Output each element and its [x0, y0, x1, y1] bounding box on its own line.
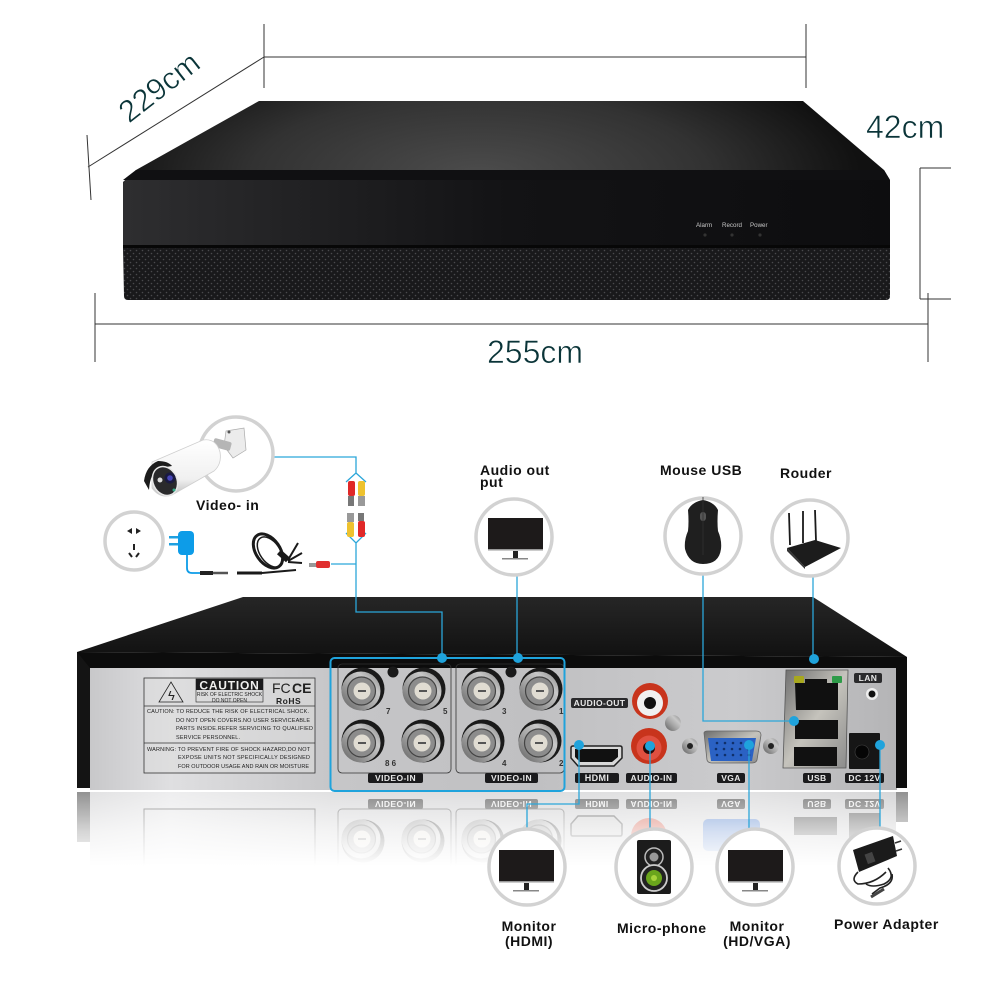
caution label: CAUTION: TO REDUCE THE RISK OF ELECTRICAL SHOCK. [147, 709, 309, 715]
audio in port [626, 728, 677, 783]
connection lines [273, 457, 885, 830]
power jack [845, 733, 884, 783]
icon: wall socket [105, 512, 163, 570]
dimension: depth 229cm [87, 24, 806, 200]
label: audio output: Audio out [480, 462, 550, 478]
front status indicators [696, 222, 768, 237]
caution label: WARNING: TO PREVENT FIRE OF SHOCK HAZARD,DO NOT [147, 747, 311, 753]
video-in connector bank [338, 664, 564, 783]
caution label: FC [272, 680, 291, 696]
icon: splitter cable [237, 529, 302, 573]
label: mouse usb: Mouse USB [660, 462, 742, 478]
icon: hdmi monitor [489, 829, 565, 905]
power jack: DC 12V [848, 773, 881, 783]
icon: vga monitor [717, 829, 793, 905]
label: microphone: Micro-phone [617, 920, 706, 936]
dimension: width 255cm: 255cm [487, 334, 583, 370]
icon: speaker [616, 829, 692, 905]
icon: mouse [665, 497, 741, 574]
front view of recorder [123, 101, 890, 300]
video-in connector bank: 3 [502, 707, 507, 716]
front status indicators: Record [722, 222, 743, 229]
lan and usb ports: USB [807, 773, 827, 783]
video-in connector bank: 4 [502, 759, 507, 768]
caution label: FOR OUTDOOR USAGE AND RAIN OR MOISTURE [178, 764, 309, 770]
lan and usb ports [783, 670, 882, 783]
reflection of rear panel: VIDEO-IN [491, 799, 532, 809]
icon: red power connector [309, 561, 330, 568]
icon: blue power plug [169, 531, 228, 573]
audio in port: AUDIO-IN [631, 773, 672, 783]
audio out port: AUDIO-OUT [574, 698, 626, 708]
video-in connector bank: 5 [443, 707, 448, 716]
caution label: DO NOT OPEN [212, 698, 247, 704]
video-in connector bank: 7 [386, 707, 391, 716]
label: monitor vga: Monitor [730, 918, 784, 934]
video-in connector bank: 1 [559, 707, 564, 716]
video-in connector bank: 8 6 [385, 759, 397, 768]
caution label: EXPOSE UNITS NOT SPECIFICALLY DESIGNED [178, 755, 310, 761]
caution label: CE [292, 680, 311, 696]
reflection of rear panel [70, 790, 920, 886]
hdmi port [571, 746, 622, 783]
icon: security camera [144, 417, 273, 500]
icon: power adapter [839, 828, 915, 904]
label: audio output: put [480, 474, 503, 490]
vga port [682, 731, 779, 783]
reflection of rear panel: USB [807, 799, 827, 809]
reflection of rear panel: AUDIO-IN [631, 799, 672, 809]
dimension: height 42cm [866, 109, 951, 299]
caution label: RISK OF ELECTRIC SHOCK [197, 692, 263, 698]
caution label: PARTS INSIDE.REFER SERVICING TO QUALIFIED [176, 726, 313, 732]
vga port: VGA [721, 773, 741, 783]
icon: router [772, 500, 848, 576]
caution label: CAUTION [199, 678, 260, 692]
dimension: width 255cm [95, 293, 928, 370]
reflection of rear panel: DC 12V [848, 799, 881, 809]
caution label: SERVICE PERSONNEL. [176, 735, 240, 741]
label: power adapter: Power Adapter [834, 916, 939, 932]
front status indicators: Power [750, 222, 768, 229]
video-in connector bank: VIDEO-IN [491, 773, 532, 783]
label: router: Rouder [780, 465, 832, 481]
audio out port [571, 683, 681, 731]
caution label: ϟ [168, 688, 175, 703]
reflection of rear panel: HDMI [585, 799, 609, 809]
label: monitor vga: (HD/VGA) [723, 933, 791, 949]
dimension: height 42cm: 42cm [866, 109, 944, 145]
reflection of rear panel: VGA [721, 799, 741, 809]
rear view of recorder [77, 597, 907, 790]
dimension: depth 229cm: 229cm [112, 45, 207, 130]
icon: bnc and rca cable ends [347, 481, 365, 537]
hdmi port: HDMI [585, 773, 609, 783]
video-in connector bank: VIDEO-IN [375, 773, 416, 783]
lan and usb ports: LAN [859, 673, 877, 683]
caution label [144, 678, 315, 773]
label: monitor hdmi: Monitor [502, 918, 556, 934]
icon: audio out monitor [476, 499, 552, 575]
label: video in: Video- in [196, 497, 259, 513]
video-in connector bank: 2 [559, 759, 564, 768]
front status indicators: Alarm [696, 222, 712, 229]
reflection of rear panel: VIDEO-IN [375, 799, 416, 809]
caution label: RoHS [276, 696, 301, 706]
caution label: DO NOT OPEN COVERS.NO USER SERVICEABLE [176, 718, 310, 724]
label: monitor hdmi: (HDMI) [505, 933, 553, 949]
